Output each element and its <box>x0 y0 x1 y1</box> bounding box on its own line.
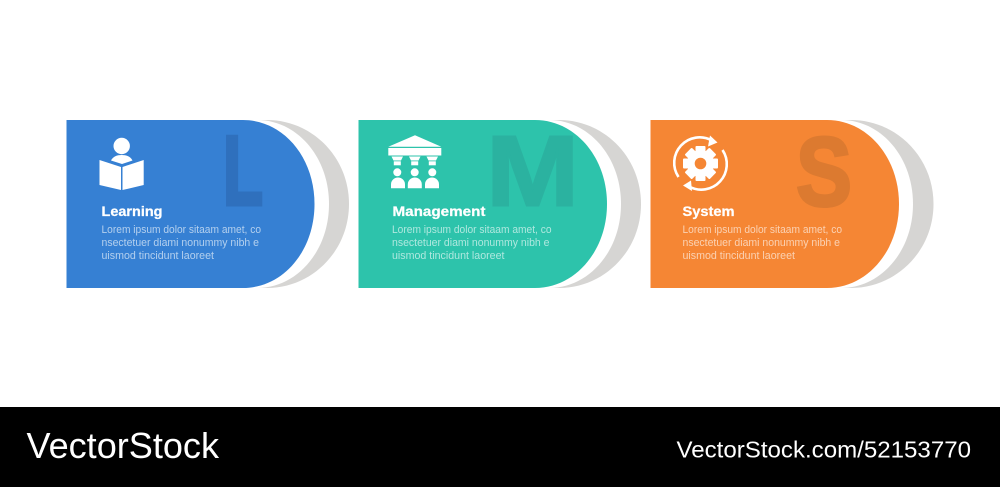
letter L: L <box>223 116 263 226</box>
heading: Management: Management <box>392 204 486 219</box>
orange card <box>650 120 899 288</box>
text block: Management description: Lorem ipsum dolor sitaam amet, co <box>392 224 552 236</box>
panel: Learning <box>66 116 349 288</box>
watermark footer band <box>0 407 1000 487</box>
text block: Management description: nsectetuer diami nonummy nibh e <box>392 237 550 249</box>
icon: institution with people <box>388 135 441 188</box>
text block: System description: nsectetuer diami nonummy nibh e <box>682 237 840 249</box>
text block: Management description: uismod tincidunt laoreet <box>392 250 504 262</box>
teal card <box>358 120 607 288</box>
text block: System description: Lorem ipsum dolor sitaam amet, co <box>682 224 842 236</box>
text block: Learning description: uismod tincidunt laoreet <box>102 250 214 262</box>
icon: gear with rotating arrows <box>674 136 727 191</box>
blue card <box>66 120 314 288</box>
text block: Learning description: nsectetuer diami nonummy nibh e <box>102 237 259 249</box>
panel: System <box>650 116 934 288</box>
text block: Learning description: Lorem ipsum dolor sitaam amet, co <box>102 224 261 236</box>
text block: System description: uismod tincidunt laoreet <box>682 250 795 262</box>
grey back layer <box>250 120 349 288</box>
footer logo text: VectorStock <box>26 425 220 466</box>
letter S: S <box>796 116 852 226</box>
panel: Management <box>358 116 641 288</box>
white middle layer <box>824 120 913 288</box>
footer URL text: VectorStock.com/52153770 <box>676 436 971 462</box>
heading: System: System <box>682 204 734 219</box>
letter M: M <box>486 116 579 228</box>
grey back layer <box>834 120 934 288</box>
icon: person reading book <box>100 138 144 190</box>
white middle layer <box>240 120 329 288</box>
heading: Learning: Learning <box>102 204 162 219</box>
white middle layer <box>532 120 621 288</box>
grey back layer <box>542 120 641 288</box>
